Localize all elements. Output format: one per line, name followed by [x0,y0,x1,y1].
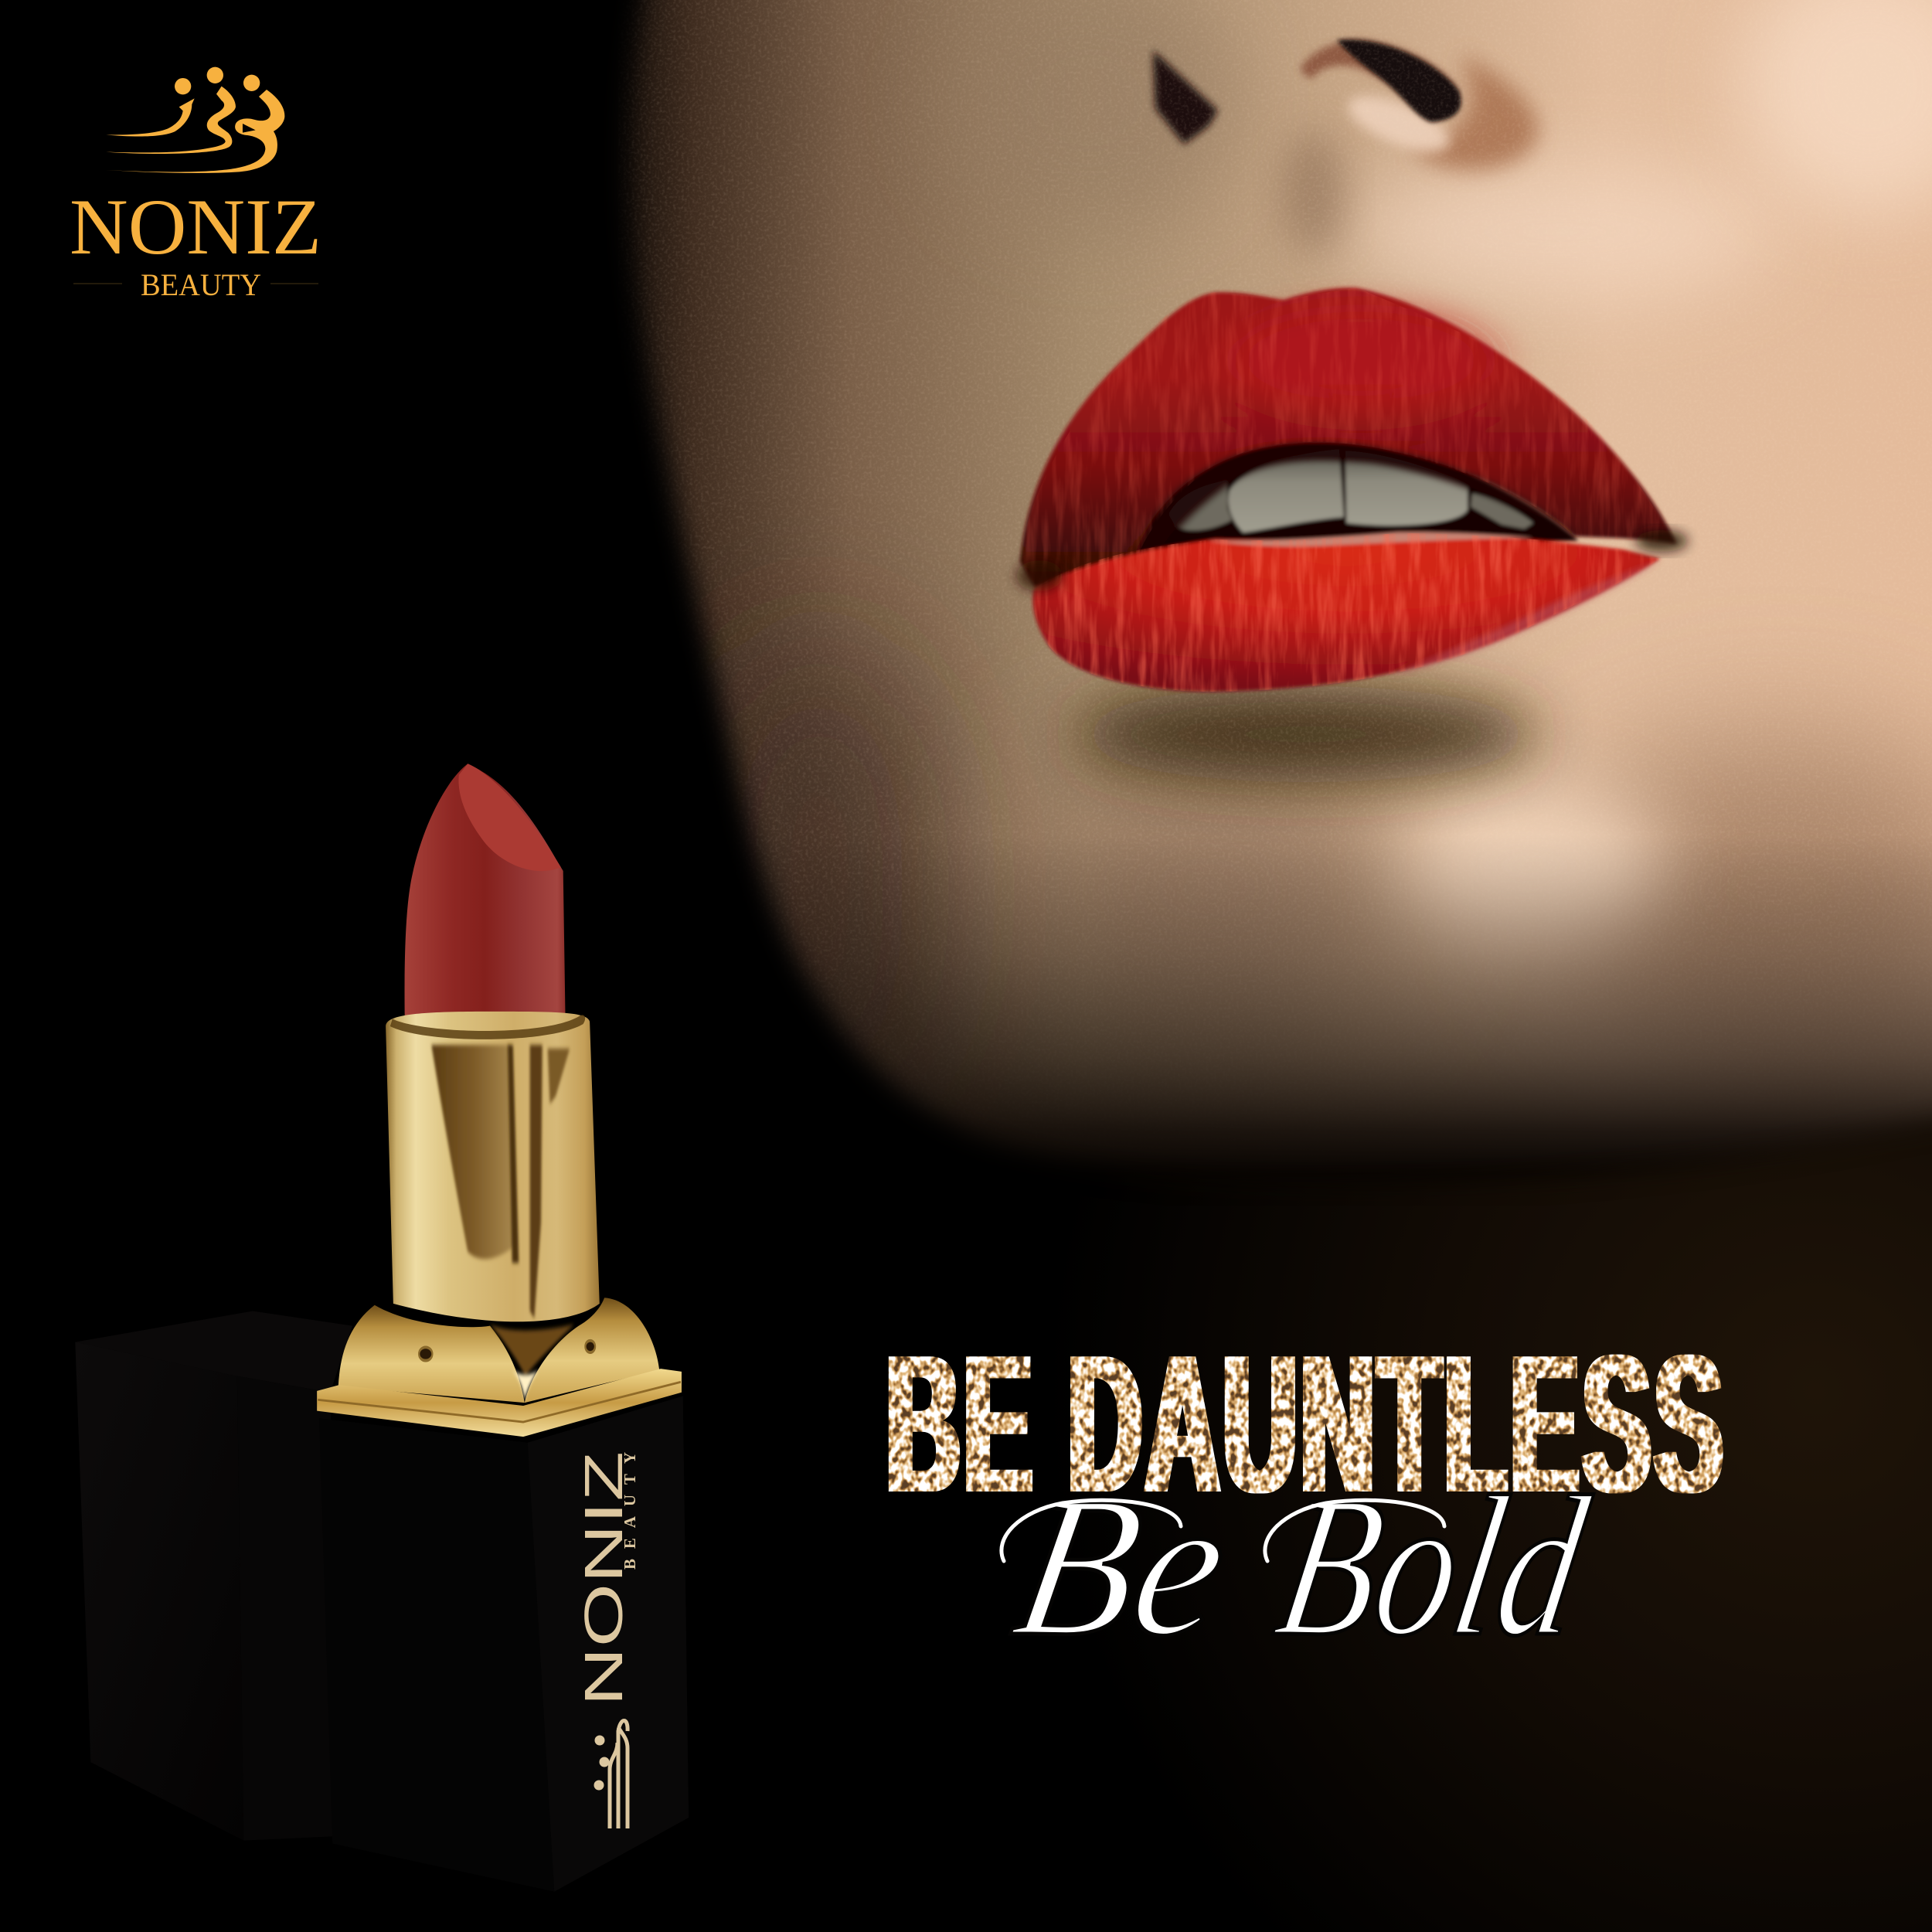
tube reflection band [508,1045,519,1263]
flourish: first b [1002,1500,1181,1561]
black base [319,1396,689,1892]
lower lip creases [1034,533,1660,692]
shading: left jaw [688,634,951,1144]
shadow: right mouth corner [1635,530,1688,552]
script word: be: Be [1001,1455,1243,1678]
shading: philtrum ridge [1283,131,1345,255]
photo: lower face [603,0,1932,1206]
tube dark reflection [431,1045,516,1259]
chin fade to black [603,835,1932,1206]
shading: nose alar crease [1410,54,1538,170]
shoulder hole right [585,1341,595,1352]
icon: logo calligraphy mark [106,67,284,173]
shoulder centre shadow [490,1325,574,1376]
shoulder highlight [512,1370,539,1400]
lipstick bullet [405,764,566,1025]
tooth: left central [1228,449,1344,532]
tooth: right lateral [1471,494,1533,529]
script line: be bold [1001,1455,1603,1678]
lower lip pink edge [1388,560,1660,677]
tube rim shadow [390,1015,585,1039]
lower lip inner highlight [1207,532,1533,546]
base label: beauty: BEAUTY [621,1452,639,1570]
gold plate [317,1369,682,1437]
tube reflection right [548,1049,570,1104]
highlight: upper lip area [1345,162,1777,301]
shoulder right face [525,1298,659,1403]
cap side face [237,1376,339,1841]
icon: base label calligraphy mark [594,1720,628,1828]
upper lip inner shadow [1139,443,1574,554]
highlight: cheek top right [1739,0,1932,216]
base right face [528,1396,689,1892]
shading: chin mid tones [1054,767,1423,1022]
icon: left nostril [1153,50,1218,145]
shoulder hole left [419,1347,432,1361]
shading: nose side [943,0,1236,232]
shadow: left mouth corner [1016,560,1063,591]
tooth: left lateral [1168,480,1232,530]
logo wordmark: NONIZ [70,183,321,271]
script word: bold: Bold [1264,1455,1603,1678]
cap top face [75,1311,352,1393]
flourish: second b [1265,1500,1444,1561]
base label: brand wordmark: NONIZ [573,1451,634,1706]
lips [1020,287,1676,692]
teeth [1168,449,1533,532]
shading: right chin tones [1546,734,1932,1043]
tube reflection thin strip [530,1045,543,1318]
icon: right nostril inner [1300,40,1458,120]
logo [70,67,321,302]
upper lip [1020,287,1676,587]
lipstick cap box [75,1311,352,1841]
mouth interior [1125,437,1579,559]
shoulder left face [338,1305,525,1403]
cap front face [75,1342,243,1841]
plate groove [318,1382,681,1422]
upper lip light [1225,304,1497,417]
gold shoulder [338,1298,659,1403]
shadow: under lower lip [1074,686,1538,782]
highlight: chin [1403,784,1665,947]
base left face [319,1418,554,1892]
icon: right nostril dark [1337,39,1461,122]
upper lip creases [1020,287,1676,587]
logo subtitle: BEAUTY [141,267,261,302]
tooth: right central [1345,451,1468,526]
highlight: under nostril [1341,85,1457,162]
skin texture [618,0,1932,1175]
lipstick product [75,764,689,1892]
bullet cut face [458,764,561,871]
gold tube [386,1012,600,1321]
lower lip [1032,533,1660,692]
